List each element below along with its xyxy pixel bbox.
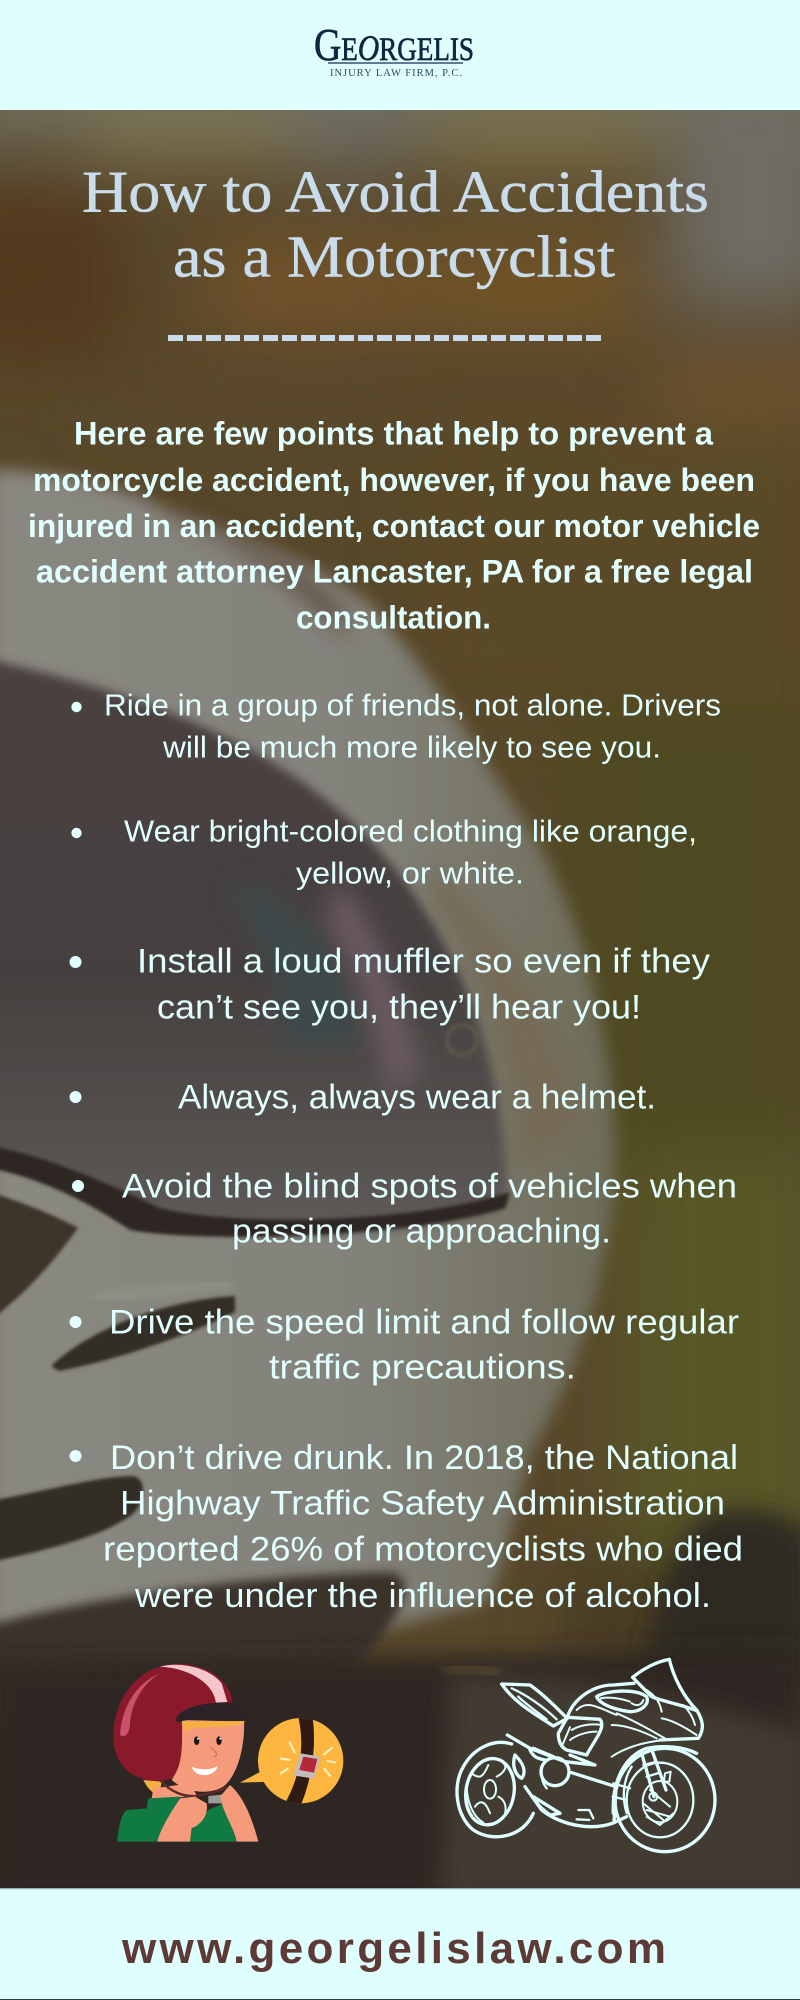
bullet: blind spots: Avoid the blind spots of vehicles when (122, 1168, 737, 1206)
bullet: helmet: Always, always wear a helmet. (178, 1078, 656, 1116)
intro paragraph: motorcycle accident, however, if you have been (33, 462, 755, 498)
bullet: bright clothing: Wear bright-colored clothing like orange, (124, 814, 697, 848)
bullet: bright clothing (71, 814, 697, 890)
title: as a Motorcyclist (173, 224, 616, 290)
icon: sport motorcycle outline (457, 1659, 715, 1852)
bullet: drunk driving: were under the influence of alcohol. (134, 1577, 711, 1615)
title dashed rule (168, 335, 603, 341)
visor (0, 660, 507, 1234)
intro paragraph: accident attorney Lancaster, PA for a free legal (36, 554, 753, 590)
bullet: drunk driving: Highway Traffic Safety Administration (120, 1484, 725, 1522)
bullet: blind spots (72, 1168, 737, 1250)
front wheel (615, 1748, 715, 1852)
visor lower rim (0, 1146, 510, 1237)
header band (0, 0, 800, 110)
speech bubble with buckle (240, 1716, 343, 1807)
bullet: bright clothing: yellow, or white. (296, 856, 524, 890)
lower helmet rim (0, 1572, 405, 1690)
bullet: ride in a group: Ride in a group of friends, not alone. Drivers (104, 688, 721, 722)
lower dark round object (640, 1509, 800, 1690)
bullet: drunk driving: Don’t drive drunk. In 2018, the National (110, 1439, 738, 1477)
bullet: drunk driving: reported 26% of motorcyclists who died (103, 1530, 743, 1568)
bullet: drunk driving (70, 1439, 743, 1615)
intro paragraph: injured in an accident, contact our motor vehicle (28, 508, 760, 544)
fork (642, 1749, 666, 1797)
bullet: speed limit: Drive the speed limit and follow regular (109, 1304, 739, 1342)
helmet shell (0, 470, 615, 1650)
intro paragraph (28, 416, 760, 636)
title (82, 158, 709, 290)
logo: GEORGELIS (314, 19, 474, 70)
seat (0, 1650, 800, 1900)
bullet: ride in a group (71, 688, 721, 764)
lower vent (0, 1476, 143, 1562)
title: How to Avoid Accidents (82, 158, 709, 224)
bullet: speed limit (70, 1304, 739, 1386)
tail (502, 1684, 567, 1726)
bullet: speed limit: traffic precautions. (269, 1348, 576, 1386)
intro paragraph: Here are few points that help to prevent a (74, 416, 713, 452)
rear wheel (457, 1742, 533, 1837)
logo: INJURY LAW FIRM, P.C. (330, 68, 462, 79)
bullet: loud muffler: Install a loud muffler so even if they (137, 942, 710, 980)
tank and fairing (567, 1683, 634, 1717)
bullet: blind spots: passing or approaching. (232, 1212, 611, 1250)
footer website url: www.georgelislaw.com (121, 1924, 666, 1973)
side panels (558, 1717, 602, 1755)
icon: rider fastening helmet strap (113, 1664, 343, 1842)
intro paragraph: consultation. (296, 600, 491, 636)
bullet: ride in a group: will be much more likely to see you. (162, 730, 661, 764)
footer band (0, 1888, 800, 2000)
belly (525, 1773, 616, 1827)
bullet: loud muffler (70, 942, 710, 1026)
left dark recess (0, 1192, 78, 1320)
bullet: loud muffler: can’t see you, they’ll hear you! (157, 988, 641, 1026)
upper vent (51, 1296, 235, 1371)
exhaust, swingarm and engine (541, 1758, 569, 1786)
